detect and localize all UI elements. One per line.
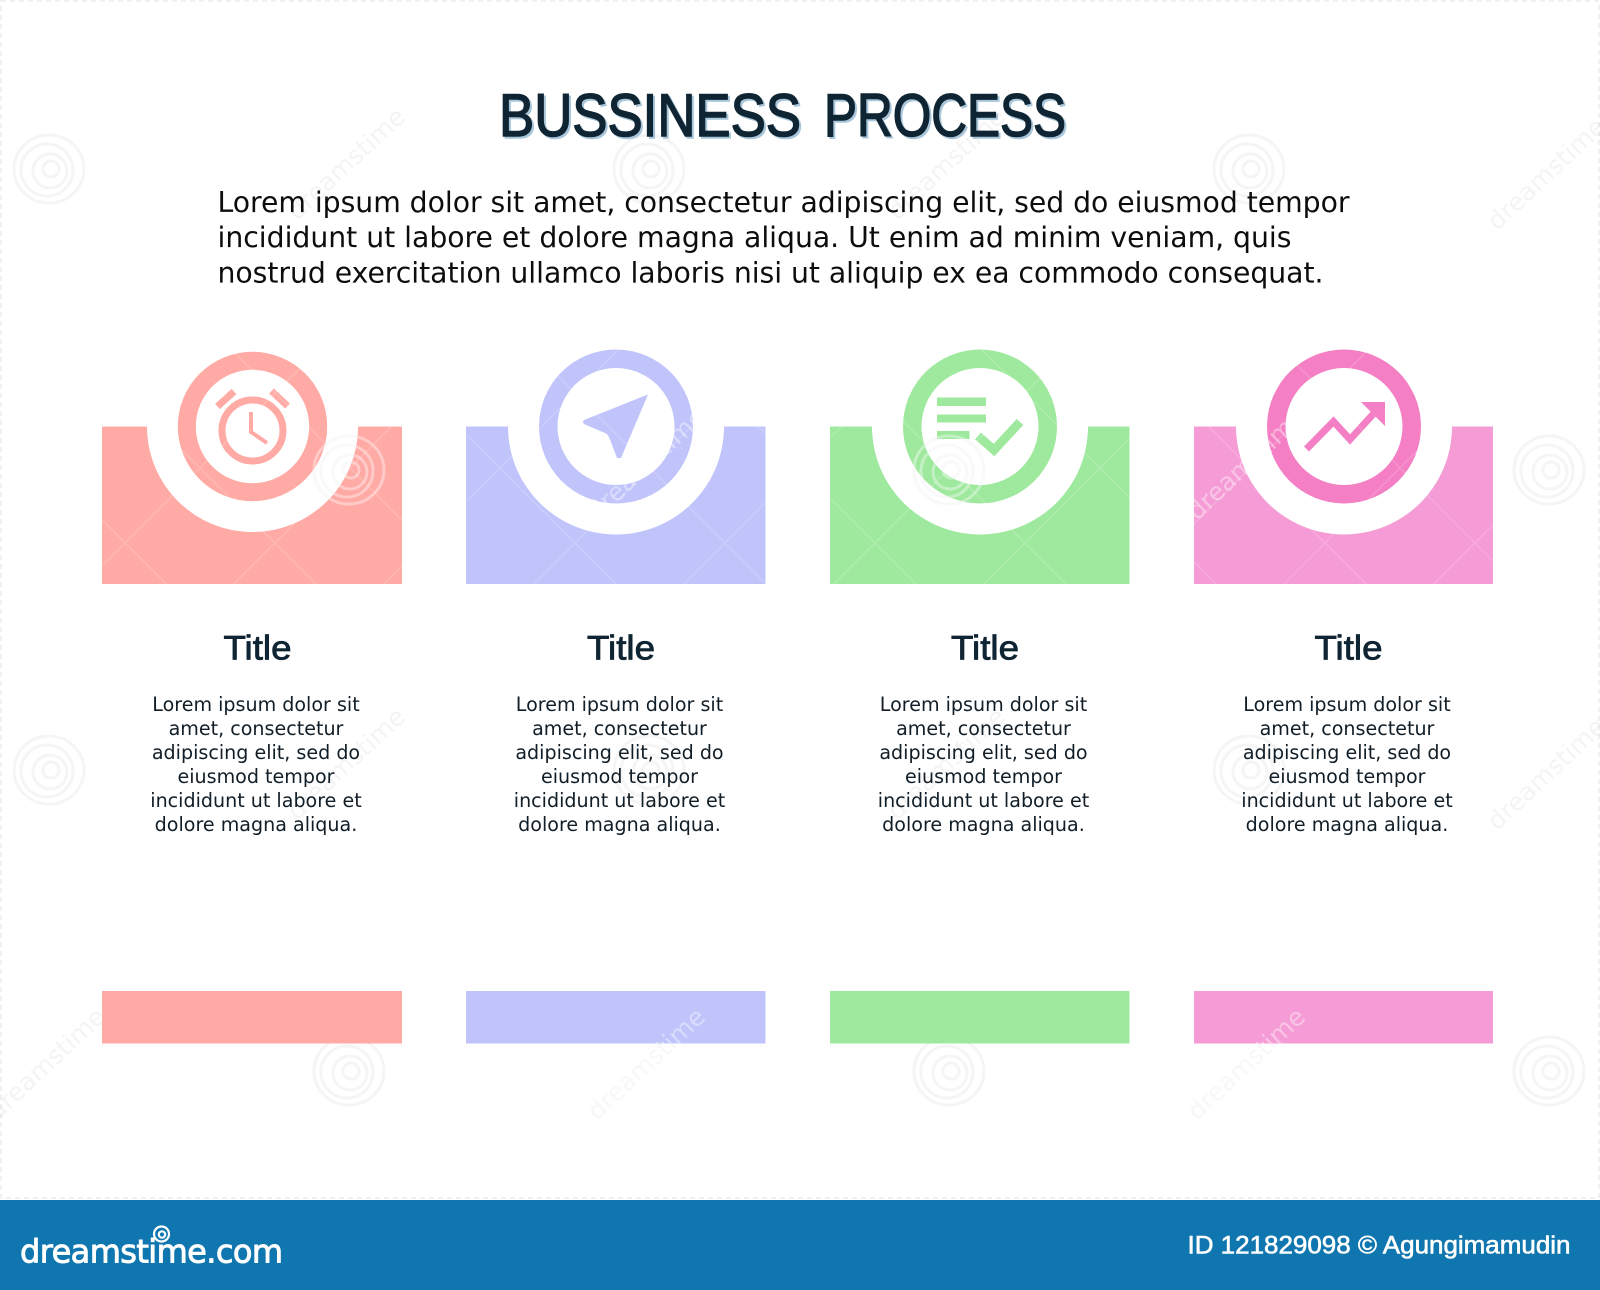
footer logo: dreamstime.com: [20, 1232, 283, 1270]
intro paragraph: nostrud exercitation ullamco laboris nisi ut aliquip ex ea commodo consequat.: [218, 256, 1324, 290]
panel: step 1 salmon: [102, 352, 402, 584]
bottom bar salmon: [102, 991, 402, 1044]
card 4 heading: Title: [1314, 630, 1382, 668]
card 4 body: eiusmod tempor: [1268, 765, 1426, 788]
card text 2: [514, 630, 726, 836]
card 2 body: adipiscing elit, sed do: [515, 741, 724, 764]
card 4 body: amet, consectetur: [1260, 717, 1435, 740]
card 4 body: Lorem ipsum dolor sit: [1243, 693, 1451, 716]
card 1 body: amet, consectetur: [169, 717, 344, 740]
intro paragraph: Lorem ipsum dolor sit amet, consectetur adipiscing elit, sed do eiusmod tempor: [218, 186, 1350, 219]
footer bar: [0, 1200, 1600, 1290]
intro paragraph: incididunt ut labore et dolore magna aliqua. Ut enim ad minim veniam, quis: [218, 221, 1292, 254]
card 3 body: Lorem ipsum dolor sit: [880, 693, 1088, 716]
card 2 body: incididunt ut labore et: [514, 789, 726, 812]
card 4 body: incididunt ut labore et: [1241, 789, 1453, 812]
intro paragraph: [218, 186, 1350, 290]
card 3 body: [878, 693, 1090, 836]
text: dreamstime: [581, 402, 711, 526]
panel 4 background: [1194, 426, 1493, 584]
icon: navigation arrow: [583, 394, 648, 458]
card 2 body: eiusmod tempor: [541, 765, 698, 788]
text: dreamstime: [581, 1002, 711, 1126]
text: dreamstime: [1181, 402, 1311, 526]
panel 1 background: [102, 426, 402, 584]
title: [499, 82, 1068, 151]
text: dreamstime: [281, 702, 411, 826]
card 2 body: amet, consectetur: [532, 717, 707, 740]
panel 3 ring: [903, 350, 1057, 504]
card 1 body: dolore magna aliqua.: [155, 813, 357, 836]
text: dreamstime: [881, 702, 1011, 826]
panel 4 ring: [1267, 350, 1421, 504]
card 1 heading: Title: [224, 630, 292, 668]
text: dreamstime: [881, 102, 1011, 226]
card 2 body: dolore magna aliqua.: [518, 813, 721, 836]
panel: step 2 lavender: [466, 350, 766, 584]
text: dreamstime: [1181, 1002, 1311, 1126]
panel 3 background: [830, 426, 1130, 584]
card 3 heading: Title: [951, 630, 1019, 668]
icon: trend arrow: [1306, 402, 1385, 449]
panel: step 4 pink: [1194, 350, 1493, 584]
card 2 heading: Title: [587, 630, 655, 668]
title: BUSSINESS: [499, 82, 801, 149]
card 3 body: dolore magna aliqua.: [882, 813, 1085, 836]
bottom bar green: [830, 991, 1130, 1044]
panel 1 ring: [178, 352, 327, 501]
title: BUSSINESS: [501, 84, 803, 151]
panel 2 background: [466, 426, 766, 584]
title: PROCESS: [824, 82, 1066, 149]
card 1 body: [150, 693, 362, 836]
icon: alarm clock: [218, 391, 288, 461]
card 4 body: adipiscing elit, sed do: [1243, 741, 1451, 764]
image id credit: ID 121829098 © Agungimamudin: [1188, 1232, 1570, 1260]
card 4 body: [1241, 693, 1453, 836]
card 3 body: adipiscing elit, sed do: [879, 741, 1088, 764]
icon: checklist: [937, 398, 1020, 450]
title: PROCESS: [826, 84, 1068, 151]
card 3 body: amet, consectetur: [896, 717, 1071, 740]
bottom bar pink: [1194, 991, 1493, 1044]
icon: logo spiral: [154, 1226, 169, 1242]
text: dreamstime: [1181, 1002, 1311, 1126]
card 1 body: eiusmod tempor: [177, 765, 335, 788]
bottom bar lavender: [466, 991, 766, 1044]
card 3 body: eiusmod tempor: [905, 765, 1062, 788]
card 1 body: Lorem ipsum dolor sit: [152, 693, 360, 716]
card 2 body: Lorem ipsum dolor sit: [516, 693, 724, 716]
card 2 body: [514, 693, 726, 836]
card 1 body: adipiscing elit, sed do: [152, 741, 360, 764]
text: dreamstime: [581, 1002, 711, 1126]
card 4 body: dolore magna aliqua.: [1246, 813, 1448, 836]
card 1 body: incididunt ut labore et: [150, 789, 362, 812]
card text 3: [878, 630, 1090, 836]
panel 2 ring: [539, 350, 693, 504]
panel: step 3 green: [830, 350, 1130, 584]
card text 4: [1241, 630, 1453, 836]
card text 1: [150, 630, 362, 836]
card 3 body: incididunt ut labore et: [878, 789, 1090, 812]
text: dreamstime: [281, 102, 411, 226]
